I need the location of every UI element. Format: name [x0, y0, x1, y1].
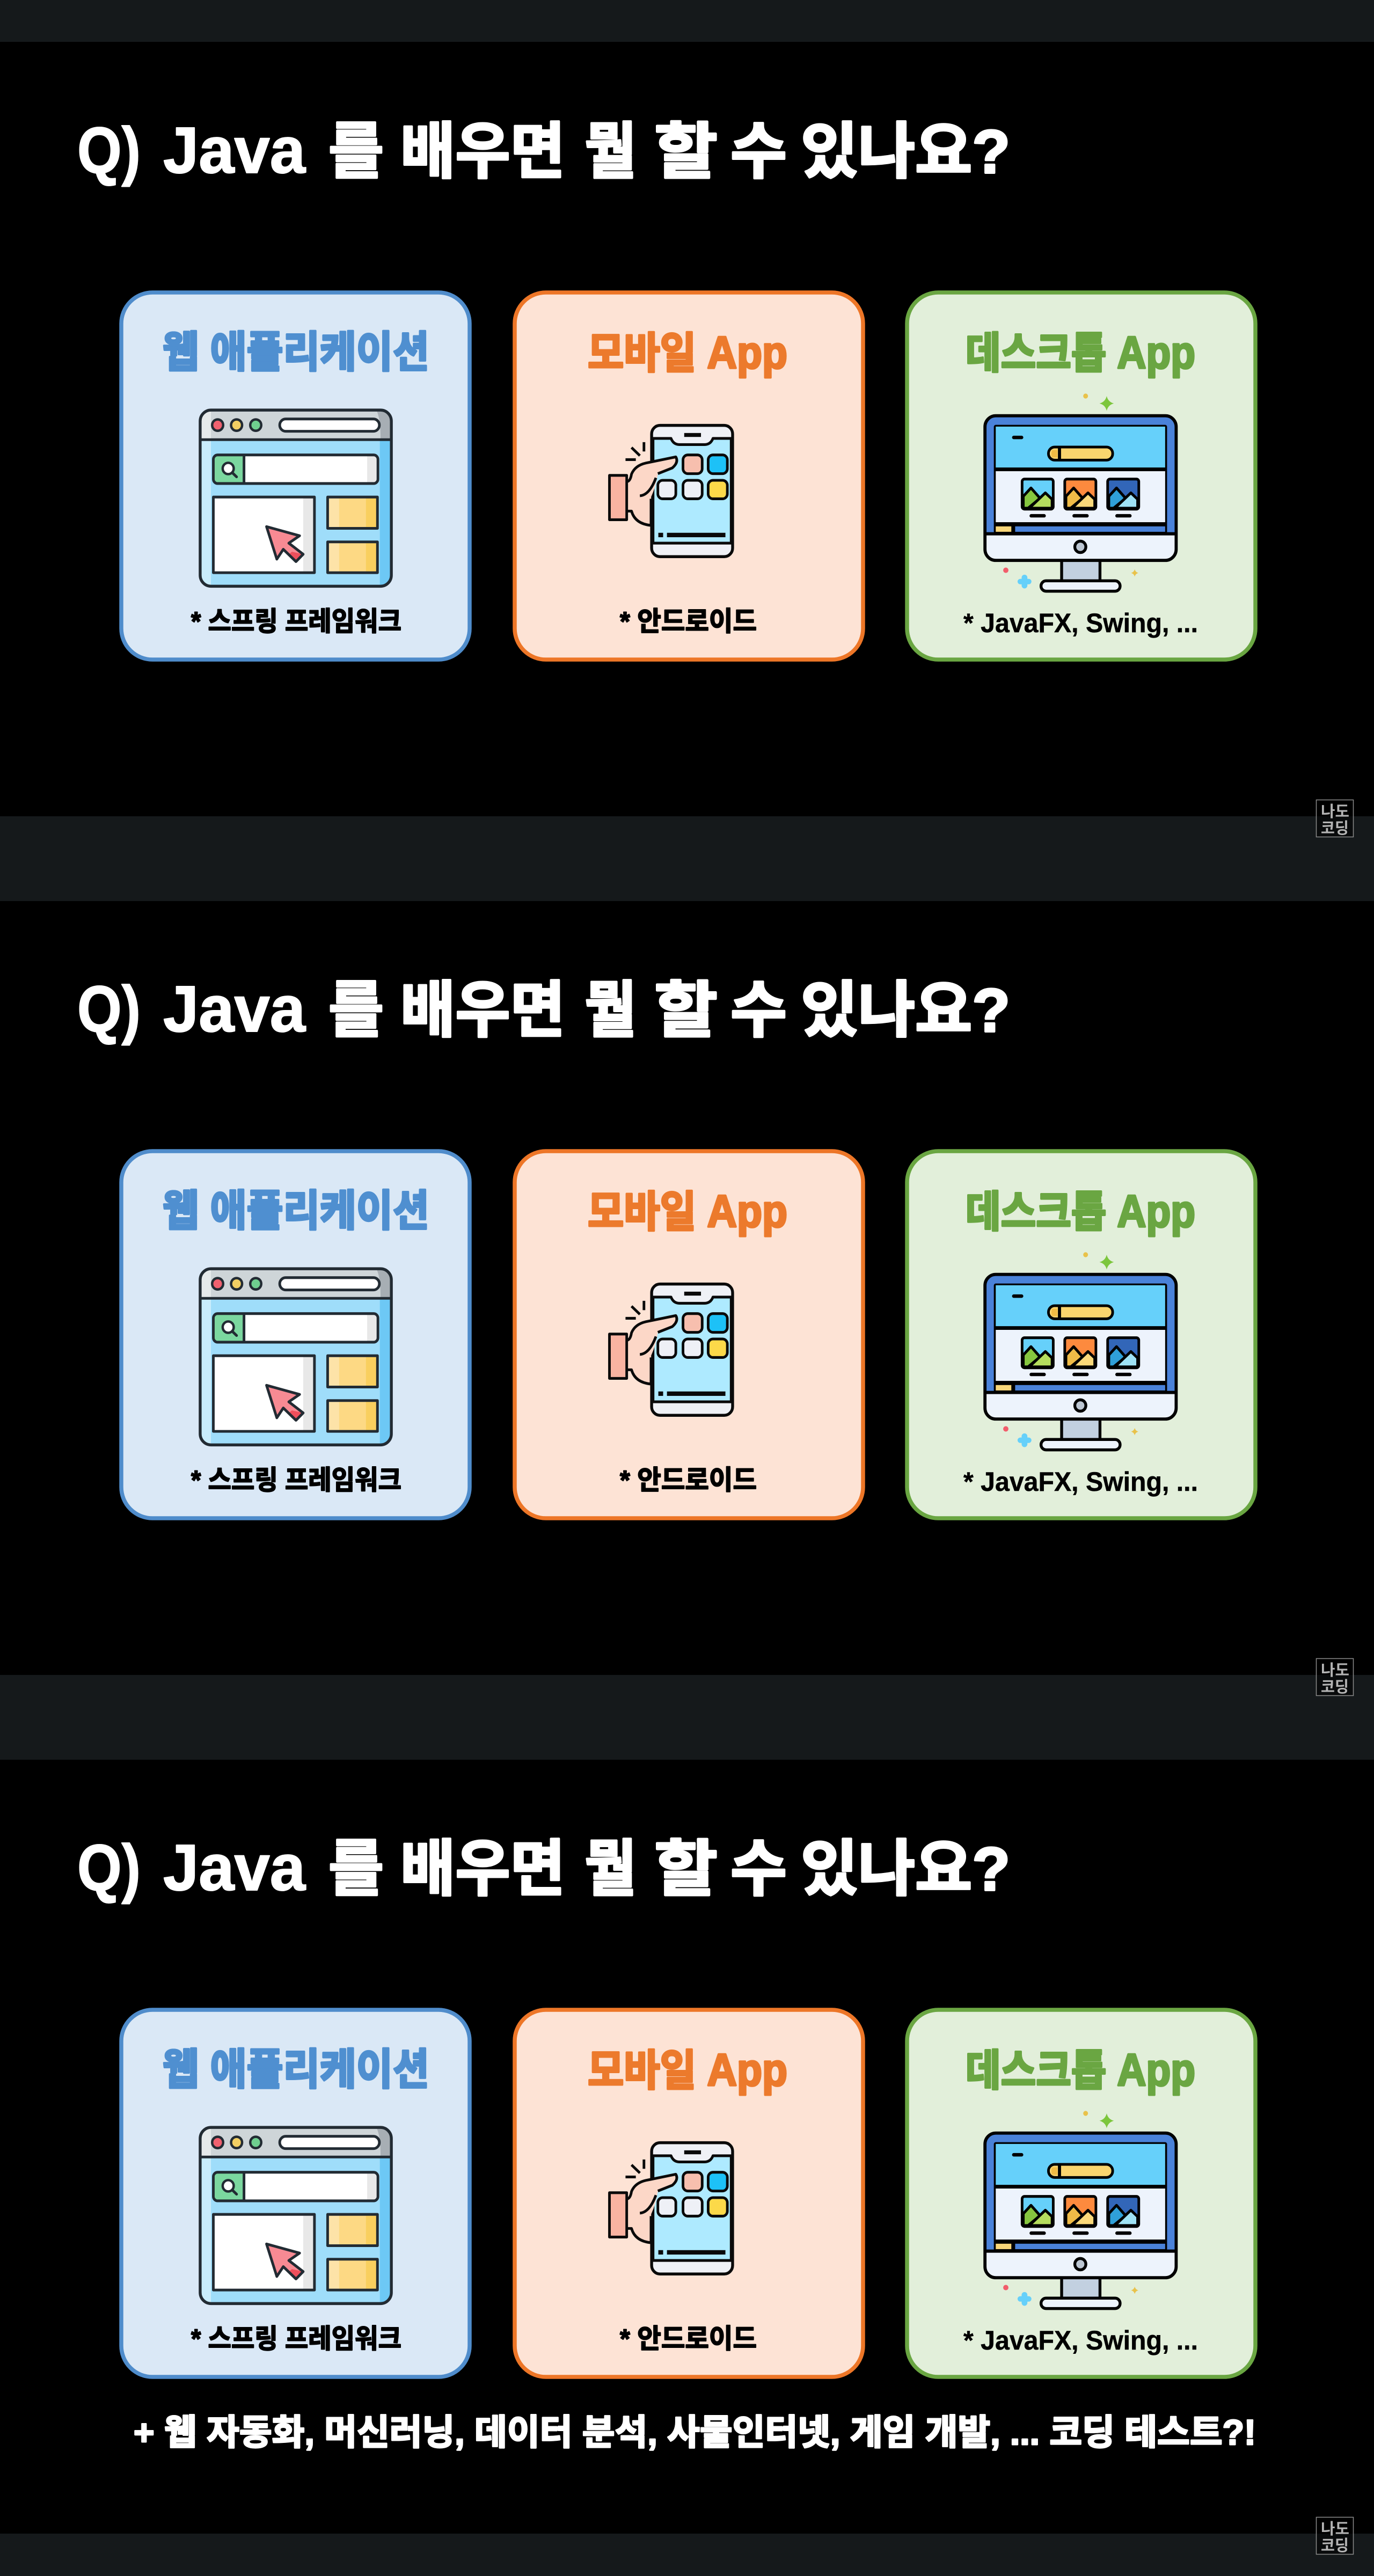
title: 수 [730, 1835, 787, 1904]
panel: web application [121, 292, 470, 660]
title: 배우면 [400, 977, 565, 1045]
top band [0, 0, 1374, 42]
bottom band [0, 2534, 1374, 2576]
panel: desktop app [907, 292, 1255, 660]
band between slides 2 and 3 [0, 1675, 1374, 1760]
panel: web application [121, 1151, 470, 1518]
title: 배우면 [400, 118, 565, 186]
card background [515, 292, 863, 660]
caption: spring framework: * 스프링 프레임워크 [191, 1465, 401, 1495]
title: 수 [730, 118, 787, 186]
caption: JavaFX, Swing: * JavaFX, Swing, ... [963, 1467, 1198, 1497]
title: 할 [654, 977, 718, 1045]
title [77, 1831, 1010, 1904]
watermark: 코딩 [1321, 819, 1349, 837]
heading: web application: 웹 애플리케이션 [163, 1187, 429, 1235]
card background [121, 292, 470, 660]
title: 를 [328, 118, 384, 186]
additional uses text: + 웹 자동화, 머신러닝, 데이터 분석, 사물인터넷, 게임 개발, ... 코딩 테스트?! [134, 2412, 1256, 2452]
title: 있나요? [801, 1835, 1010, 1904]
icon: browser window [200, 410, 391, 586]
slide 3 [77, 1831, 1354, 2555]
heading: desktop app: 데스크톱 App [966, 327, 1195, 378]
title: 할 [654, 1835, 718, 1904]
title: 뭘 [584, 977, 637, 1045]
caption: spring framework: * 스프링 프레임워크 [191, 606, 401, 636]
watermark: 나도 [1321, 1662, 1349, 1679]
title: 있나요? [801, 118, 1010, 186]
heading: desktop app: 데스크톱 App [966, 2045, 1195, 2095]
title: Java [163, 972, 306, 1045]
panel: web application [121, 2010, 470, 2377]
watermark [1316, 800, 1354, 837]
heading: mobile app: 모바일 App [588, 2045, 787, 2095]
caption: spring framework: * 스프링 프레임워크 [191, 2324, 401, 2354]
icon: phone with hand [610, 2143, 733, 2274]
title: Q) [77, 972, 141, 1045]
caption: android: * 안드로이드 [620, 1465, 757, 1495]
card background [907, 292, 1255, 660]
card background [907, 2010, 1255, 2377]
heading: desktop app: 데스크톱 App [966, 1186, 1195, 1236]
card background [515, 2010, 863, 2377]
title [77, 972, 1010, 1045]
panel: mobile app [515, 2010, 863, 2377]
title: 를 [328, 977, 384, 1045]
title: 를 [328, 1835, 384, 1904]
icon: browser window [200, 1269, 391, 1445]
title: Java [163, 114, 306, 187]
icon: desktop monitor [985, 393, 1176, 591]
caption: JavaFX, Swing: * JavaFX, Swing, ... [963, 2325, 1198, 2355]
card background [121, 2010, 470, 2377]
icon: phone with hand [610, 426, 733, 557]
panel: desktop app [907, 1151, 1255, 1518]
panel: mobile app [515, 292, 863, 660]
card background [121, 1151, 470, 1518]
title: 할 [654, 118, 718, 186]
title: Q) [77, 1831, 141, 1904]
title: 뭘 [584, 118, 637, 186]
title: Q) [77, 114, 141, 187]
watermark: 나도 [1321, 803, 1349, 821]
icon: phone with hand [610, 1284, 733, 1415]
slide 2 [77, 972, 1354, 1696]
slide 1 [77, 114, 1354, 837]
heading: mobile app: 모바일 App [588, 1186, 787, 1236]
heading: mobile app: 모바일 App [588, 327, 787, 378]
card background [515, 1151, 863, 1518]
panel: desktop app [907, 2010, 1255, 2377]
watermark [1316, 2517, 1354, 2555]
band between slides 1 and 2 [0, 816, 1374, 901]
watermark: 나도 [1321, 2520, 1349, 2538]
watermark: 코딩 [1321, 2537, 1349, 2555]
caption: android: * 안드로이드 [620, 606, 757, 636]
icon: desktop monitor [985, 1252, 1176, 1450]
panel: mobile app [515, 1151, 863, 1518]
heading: web application: 웹 애플리케이션 [163, 2046, 429, 2094]
watermark [1316, 1658, 1354, 1696]
watermark: 코딩 [1321, 1678, 1349, 1696]
icon: desktop monitor [985, 2111, 1176, 2309]
title: Java [163, 1831, 306, 1904]
title [77, 114, 1010, 187]
title: 뭘 [584, 1835, 637, 1904]
title: 있나요? [801, 977, 1010, 1045]
caption: JavaFX, Swing: * JavaFX, Swing, ... [963, 608, 1198, 638]
card background [907, 1151, 1255, 1518]
heading: web application: 웹 애플리케이션 [163, 328, 429, 376]
title: 배우면 [400, 1835, 565, 1904]
title: 수 [730, 977, 787, 1045]
icon: browser window [200, 2127, 391, 2303]
caption: android: * 안드로이드 [620, 2324, 757, 2354]
